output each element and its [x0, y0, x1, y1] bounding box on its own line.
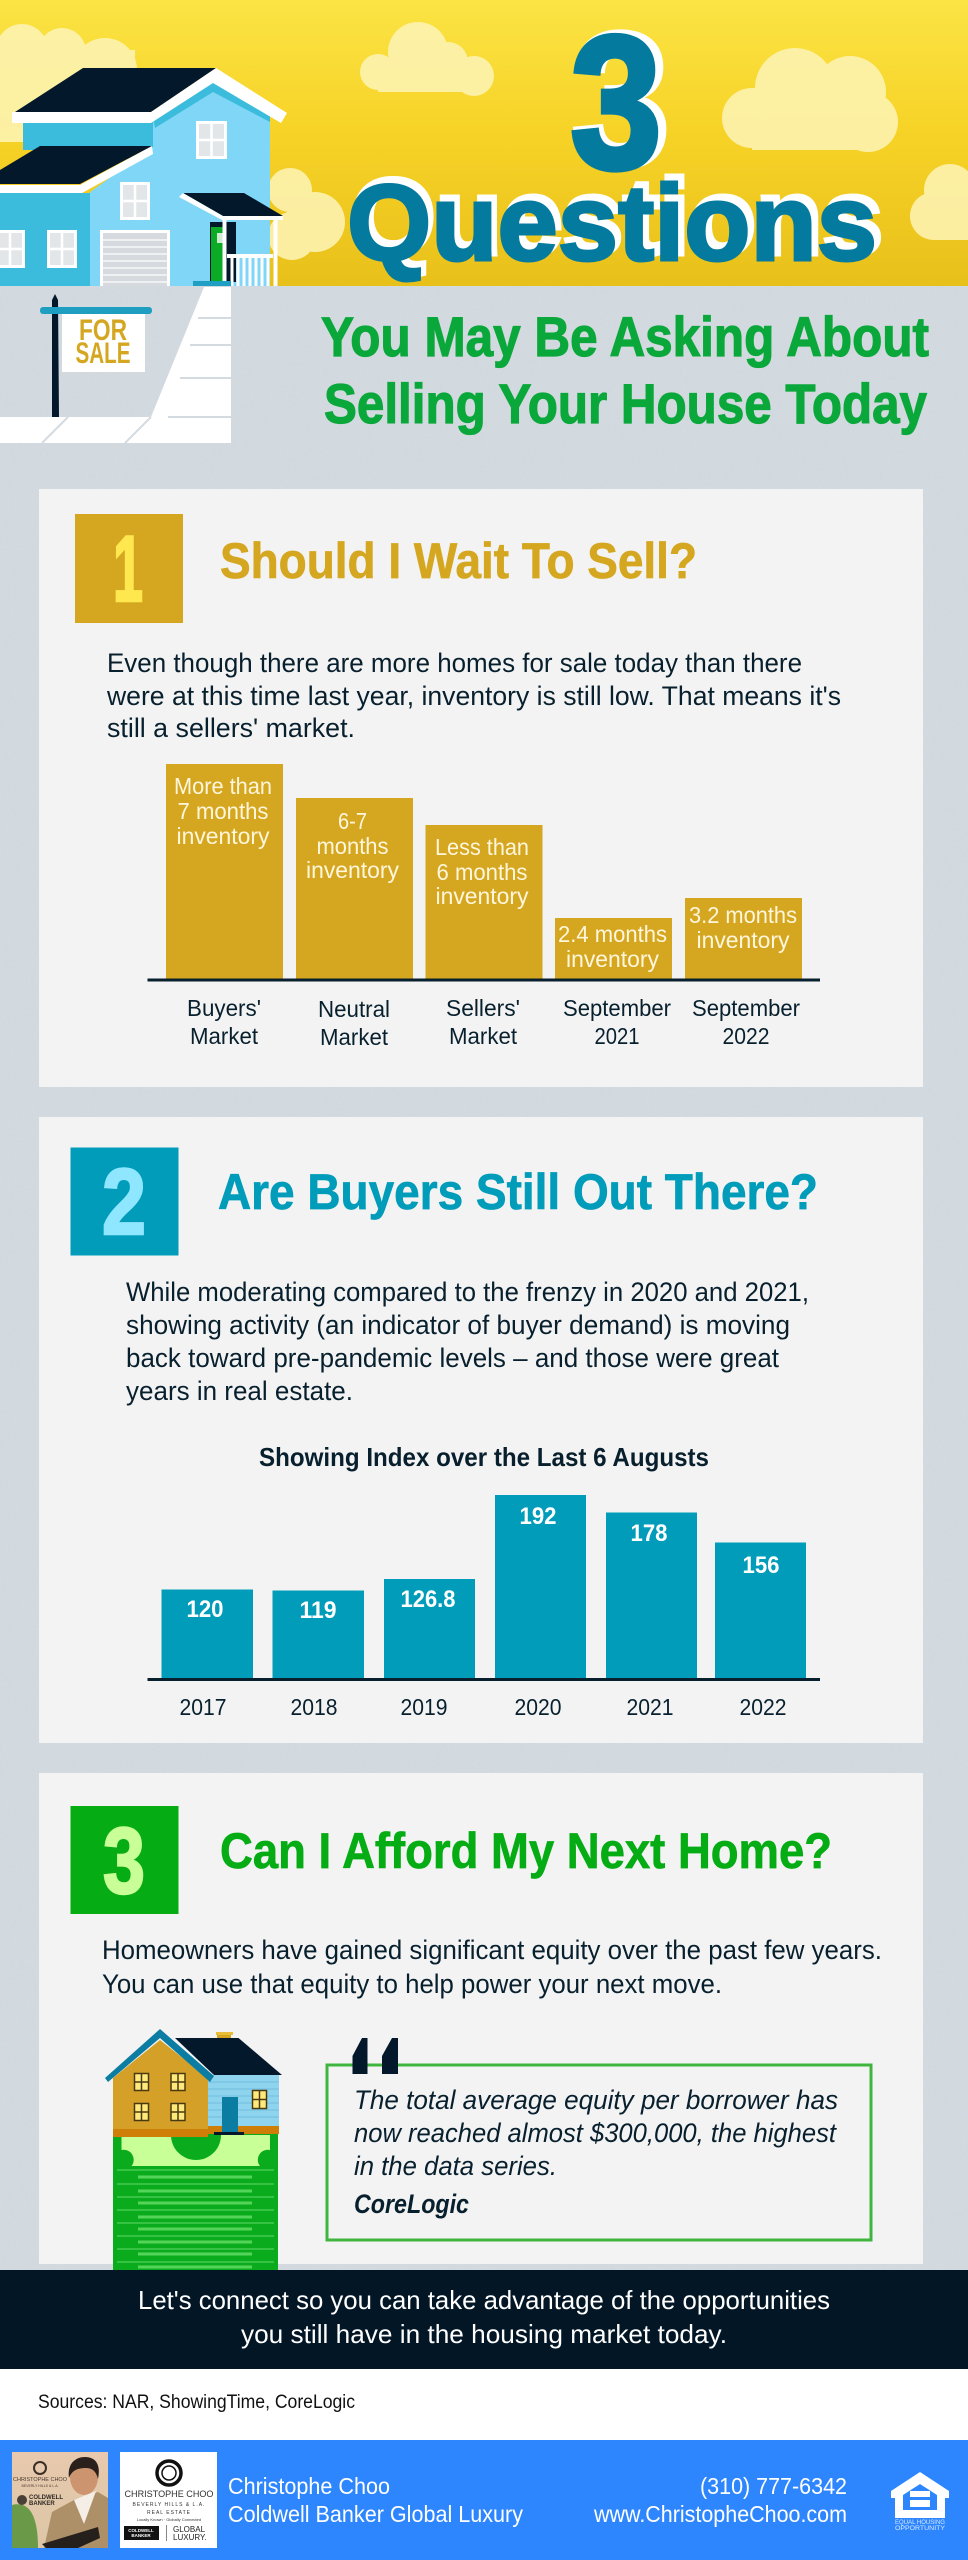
- x axis years: 2020: [514, 1694, 562, 1720]
- agent photo: COLDWELL: [29, 2495, 63, 2501]
- number badge 3: 3: [103, 1808, 145, 1913]
- bar: 2019: [384, 1579, 475, 1678]
- quote text: in the data series.: [354, 2151, 557, 2181]
- bar: neutral market: 6-7: [338, 808, 367, 834]
- sign text: FOR: [79, 314, 127, 347]
- agent name: [228, 2473, 523, 2527]
- number badge 1: [75, 514, 183, 623]
- body text 2: While moderating compared to the frenzy in 2020 and 2021,: [126, 1277, 809, 1307]
- porch door: [210, 222, 236, 283]
- lower roof trim: [0, 146, 153, 193]
- bar: september 2021: inventory: [566, 946, 659, 972]
- x axis labels: September: [692, 995, 800, 1021]
- call to action band: Let's connect so you can take advantage of the opportunities: [138, 2285, 830, 2315]
- gold gable wall: [113, 2040, 208, 2130]
- sign arm: [40, 307, 152, 314]
- agent contact: www.ChristopheChoo.com: [593, 2501, 847, 2527]
- bar: 2022: [715, 1542, 806, 1678]
- body text 1: still a sellers' market.: [107, 713, 355, 743]
- x axis years: 2018: [290, 1694, 338, 1720]
- bar: 2020: [495, 1495, 586, 1678]
- agent contact: [593, 2473, 847, 2527]
- garage door: [100, 230, 170, 286]
- body text 2: years in real estate.: [126, 1376, 353, 1406]
- numeral 3: 3: [570, 0, 662, 209]
- bar: buyers' market: More than: [174, 773, 272, 799]
- body text 1: were at this time last year, inventory is still low. That means it's: [106, 681, 841, 711]
- x axis labels: Market: [190, 1023, 259, 1049]
- for sale sign: [40, 294, 152, 417]
- lower windows: [0, 230, 77, 268]
- panel: question 3: [39, 1773, 923, 2270]
- bar: neutral market: [296, 798, 413, 979]
- call to action band: [0, 2270, 968, 2369]
- dark roof: [175, 2038, 282, 2075]
- x axis labels: 2022: [722, 1023, 770, 1049]
- bar: 2021: [606, 1512, 697, 1678]
- agent photo: [12, 2452, 108, 2548]
- bar: buyers' market: 7 months: [178, 798, 268, 824]
- agent contact: (310) 777-6342: [700, 2473, 847, 2499]
- upper-left wall: [23, 120, 154, 150]
- word Questions: Questions: [347, 162, 877, 283]
- bar: september 2022: inventory: [696, 927, 790, 953]
- lower-left wall: [0, 193, 92, 286]
- panel: question 1: [39, 489, 923, 1087]
- agent footer: [0, 2440, 968, 2560]
- number badge 2: 2: [102, 1149, 146, 1254]
- x axis years: 2019: [400, 1694, 448, 1720]
- body text 2: showing activity (an indicator of buyer demand) is moving: [126, 1310, 790, 1340]
- quote marks: [352, 2038, 398, 2074]
- windows: [134, 2074, 266, 2120]
- orange base: [113, 2126, 279, 2137]
- quote text: The total average equity per borrower has: [354, 2085, 838, 2115]
- heading 3: Can I Afford My Next Home?: [220, 1823, 832, 1879]
- bar: neutral market: inventory: [306, 857, 399, 883]
- icon: equal housing opportunity: OPPORTUNITY: [895, 2526, 945, 2532]
- gable shade: [153, 80, 270, 128]
- bar: 2018: 119: [300, 1597, 336, 1624]
- porch railing: [227, 254, 273, 286]
- numeral 3: 3: [572, 0, 670, 206]
- yellow sky: [0, 0, 968, 286]
- upper window: [196, 121, 227, 159]
- agent logo: LUXURY.: [173, 2533, 206, 2542]
- x axis labels: September: [563, 995, 671, 1021]
- agent name: Christophe Choo: [228, 2473, 390, 2499]
- blue side wall: [208, 2075, 279, 2127]
- bar: september 2022: [685, 898, 802, 979]
- agent logo: GLOBAL: [173, 2525, 206, 2534]
- word Questions: Questions: [351, 156, 883, 277]
- porch roof: [183, 193, 283, 216]
- agent logo: CHRISTOPHE CHOO: [124, 2489, 214, 2500]
- subtitle: [321, 305, 929, 435]
- quote text: [354, 2085, 838, 2219]
- x axis labels: Market: [320, 1024, 389, 1050]
- money stack: [113, 2134, 278, 2270]
- teal gable trim: [105, 2029, 214, 2082]
- bar: 2019: 126.8: [400, 1586, 456, 1613]
- x axis labels: [187, 995, 800, 1050]
- agent logo: Locally Known · Globally Connected: [137, 2517, 201, 2522]
- body text 3: [102, 1935, 882, 1999]
- agent logo: BEVERLY HILLS & L.A.: [133, 2502, 205, 2508]
- house illustration: [0, 68, 287, 286]
- bar: neutral market: months: [316, 833, 388, 859]
- sign text: SALE: [76, 337, 130, 370]
- bar: sellers' market: inventory: [436, 883, 529, 909]
- agent logo: BANKER: [131, 2533, 151, 2538]
- bar: september 2021: [555, 918, 672, 979]
- x axis labels: 2021: [594, 1023, 640, 1049]
- sign post: [52, 294, 59, 417]
- chart axis: [148, 1678, 820, 1681]
- chimney: [216, 2032, 233, 2048]
- number badge 2: [70, 1148, 178, 1256]
- main roof: [15, 68, 216, 112]
- number badge 1: 1: [113, 516, 143, 621]
- x axis years: 2022: [740, 1694, 786, 1720]
- number badge 3: [70, 1806, 178, 1914]
- agent name: Coldwell Banker Global Luxury: [228, 2501, 523, 2527]
- sign text: [76, 314, 130, 370]
- bar chart: months of inventory: [148, 764, 820, 1050]
- agent logo: [120, 2452, 217, 2548]
- clouds: [0, 22, 968, 260]
- quote text: CoreLogic: [354, 2189, 469, 2219]
- sidewalk: [0, 287, 231, 443]
- agent photo: BANKER: [29, 2501, 55, 2507]
- body text 1: [106, 648, 841, 743]
- bar: sellers' market: Less than: [435, 834, 529, 860]
- body text 2: [126, 1277, 809, 1406]
- main light-blue wall: [90, 85, 270, 286]
- x axis labels: Sellers': [446, 995, 520, 1021]
- quote box: [327, 2065, 871, 2240]
- callout: CoreLogic quote: [327, 2038, 871, 2240]
- middle window: [120, 182, 150, 220]
- x axis labels: Market: [449, 1023, 518, 1049]
- panel: question 2: [39, 1117, 923, 1743]
- main roof trim: [12, 68, 287, 123]
- x axis years: 2021: [626, 1694, 674, 1720]
- quote text: now reached almost $300,000, the highest: [354, 2118, 837, 2148]
- porch step: [193, 281, 231, 286]
- title: 3 Questions: [347, 0, 883, 283]
- sources strip: Sources: NAR, ShowingTime, CoreLogic: [38, 2392, 355, 2413]
- x axis labels: Neutral: [318, 996, 390, 1022]
- bar: sellers' market: [426, 825, 542, 979]
- bar: buyers' market: inventory: [176, 823, 270, 849]
- body text 2: back toward pre-pandemic levels – and those were great: [126, 1343, 779, 1373]
- door: [214, 2097, 244, 2135]
- heading 2: Are Buyers Still Out There?: [218, 1164, 818, 1220]
- x axis years: 2017: [180, 1694, 226, 1720]
- body text 3: Homeowners have gained significant equity over the past few years.: [102, 1935, 882, 1965]
- icon: equal housing opportunity: [891, 2472, 949, 2532]
- header banner: [0, 0, 968, 286]
- x axis years: [180, 1694, 786, 1720]
- bar: 2022: 156: [742, 1552, 780, 1579]
- agent logo: COLDWELL: [128, 2528, 154, 2533]
- bar: september 2021: 2.4 months: [558, 921, 667, 947]
- icon: house on a stack of money: [105, 2029, 282, 2270]
- bar: 2017: 120: [186, 1596, 224, 1623]
- porch posts: [224, 218, 276, 286]
- chart title: Showing Index over the Last 6 Augusts: [259, 1442, 709, 1472]
- bar: buyers' market: [166, 764, 283, 979]
- bar: sellers' market: 6 months: [436, 859, 528, 885]
- chart axis: [148, 978, 820, 982]
- call to action band: you still have in the housing market today.: [241, 2319, 727, 2349]
- bar: 2020: 192: [520, 1503, 556, 1530]
- agent logo: REAL ESTATE: [147, 2510, 191, 2516]
- icon: equal housing opportunity: EQUAL HOUSING: [895, 2520, 945, 2526]
- sign board: [62, 314, 145, 372]
- x axis labels: Buyers': [187, 995, 261, 1021]
- bar: 2017: [162, 1590, 253, 1678]
- lower roof: [0, 146, 152, 184]
- bar chart: showing index: [148, 1442, 820, 1720]
- heading 1: Should I Wait To Sell?: [220, 533, 697, 589]
- bar: september 2022: 3.2 months: [689, 902, 797, 928]
- agent photo: BEVERLY HILLS & L.A.: [21, 2484, 59, 2488]
- porch roof trim: [179, 193, 283, 220]
- agent photo: CHRISTOPHE CHOO: [13, 2477, 68, 2483]
- body text 1: Even though there are more homes for sale today than there: [107, 648, 802, 678]
- body text 3: You can use that equity to help power your next move.: [102, 1969, 722, 1999]
- bar: 2018: [272, 1590, 364, 1678]
- bar: 2021: 178: [630, 1520, 668, 1547]
- sources strip: [0, 2369, 968, 2440]
